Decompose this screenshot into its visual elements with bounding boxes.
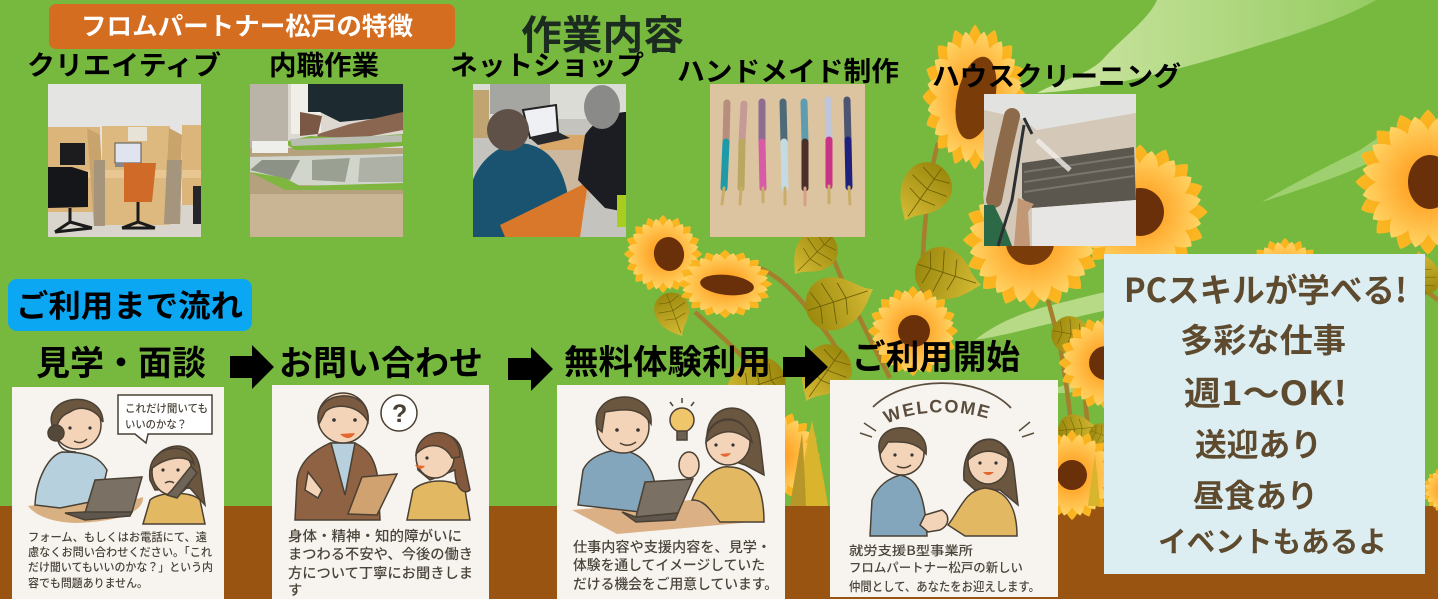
- sunflower: right of cleaning photo: [1072, 144, 1208, 280]
- caption: step 2: まつわる不安や、今後の働き: [288, 543, 473, 564]
- sunflower: left of panel: [1058, 316, 1154, 410]
- arrow 3: [783, 345, 828, 389]
- caption: step 2: 方について丁寧にお聞きしま: [288, 562, 473, 583]
- sunflower: far right: [1356, 110, 1438, 254]
- header badge: features: [49, 4, 455, 49]
- arrow 2: [508, 347, 553, 391]
- panel: highlights: 多彩な仕事: [1180, 314, 1346, 362]
- sunflower: tilted: [678, 250, 772, 318]
- caption: step 3: だける機会をご用意しています。: [573, 574, 778, 594]
- panel: highlights: 昼食あり: [1193, 471, 1318, 517]
- photo: two people at a laptop: [473, 84, 626, 237]
- heading: work content: 作業内容: [521, 3, 684, 61]
- sunflower: right edge bottom: [1422, 468, 1438, 512]
- caption: step 3: [573, 537, 778, 594]
- caption: step 4: [849, 540, 1040, 595]
- illustration: staff with clipboard and client: [295, 393, 470, 520]
- sunflower stems: [695, 143, 1438, 445]
- sunflower: below cleaning photo: [963, 171, 1101, 309]
- caption: step 1: 慮なくお問い合わせください。「これ: [28, 544, 212, 560]
- step heading: start of use: ご利用開始: [852, 330, 1020, 379]
- illustration: staff with clipboard and client: ?: [392, 400, 407, 428]
- caption: step 3: 仕事内容や支援内容を、見学・: [573, 537, 771, 557]
- panel: highlights: 週1～OK!: [1184, 367, 1347, 415]
- caption: step 3: 体験を通してイメージしていた: [573, 555, 765, 575]
- arrow 1: [230, 345, 274, 389]
- label: house cleaning: ハウスクリーニング: [932, 55, 1181, 94]
- sunflower: peeking behind panel: [1245, 238, 1325, 318]
- sunflower: top behind photo: [922, 24, 1028, 169]
- photo: office carrels: [48, 84, 201, 237]
- panel: highlights: PCスキルが学べる!: [1124, 264, 1407, 312]
- sunflower leaves: [650, 153, 1438, 451]
- speech bubble text: [125, 400, 208, 432]
- background: ground: [0, 506, 1438, 599]
- card: step 4: [830, 380, 1058, 597]
- illustration: handshake: [870, 428, 1018, 536]
- step heading: free trial: 無料体験利用: [564, 335, 771, 384]
- button: flow to use: ご利用まで流れ: [16, 281, 243, 326]
- header badge: features: フロムパートナー松戸の特徴: [81, 7, 413, 43]
- step heading: inquiry: お問い合わせ: [279, 336, 483, 385]
- sunflower: bottom near panel: [1027, 430, 1117, 520]
- illustration: trial work at laptop: [572, 397, 764, 534]
- caption: step 2: 身体・精神・知的障がいに: [288, 525, 462, 546]
- panel: highlights: イベントもあるよ: [1158, 519, 1387, 561]
- card: step 1: [12, 387, 224, 599]
- card: step 2: [272, 385, 489, 599]
- photo: air conditioner cleaning: [984, 94, 1136, 246]
- panel: highlights: 送迎あり: [1195, 420, 1322, 466]
- label: handmade: ハンドメイド制作: [677, 50, 899, 89]
- caption: step 4: フロムパートナー松戸の新しい: [849, 557, 1023, 576]
- step heading: visit and interview: 見学・面談: [36, 336, 206, 385]
- speech bubble text: これだけ聞いても: [125, 400, 208, 416]
- illustration: operator and caller: [28, 395, 212, 524]
- caption: step 2: [288, 525, 473, 599]
- welcome arc: WELCOME: [882, 400, 990, 422]
- background: pale green hill streaks: [975, 0, 1420, 393]
- grass blades: [790, 420, 1100, 506]
- photo: hands packing green packets: [250, 84, 403, 237]
- caption: step 4: 仲間として、あなたをお迎えします。: [849, 576, 1040, 595]
- card: step 3: [557, 385, 785, 599]
- caption: step 1: だけ聞いてもいいのかな？」という内: [28, 559, 213, 575]
- caption: step 1: フォーム、もしくはお電話にて、遠: [28, 529, 207, 545]
- sunflower: small left: [624, 215, 702, 293]
- photo: decorated pens: [710, 84, 865, 237]
- speech bubble text: いいのかな？: [125, 416, 187, 432]
- panel: highlights: [1104, 254, 1425, 574]
- caption: step 1: [28, 529, 213, 591]
- sunflower: centre: [868, 286, 958, 376]
- label: creative: クリエイティブ: [27, 44, 221, 83]
- welcome arc: [860, 382, 1034, 438]
- label: net shop: ネットショップ: [450, 44, 644, 83]
- caption: step 4: 就労支援B型事業所: [849, 540, 974, 559]
- sunflower: peeking behind step 3: [730, 410, 820, 500]
- caption: step 1: 容でも問題ありません。: [28, 575, 148, 591]
- label: piecework: 内職作業: [269, 44, 379, 83]
